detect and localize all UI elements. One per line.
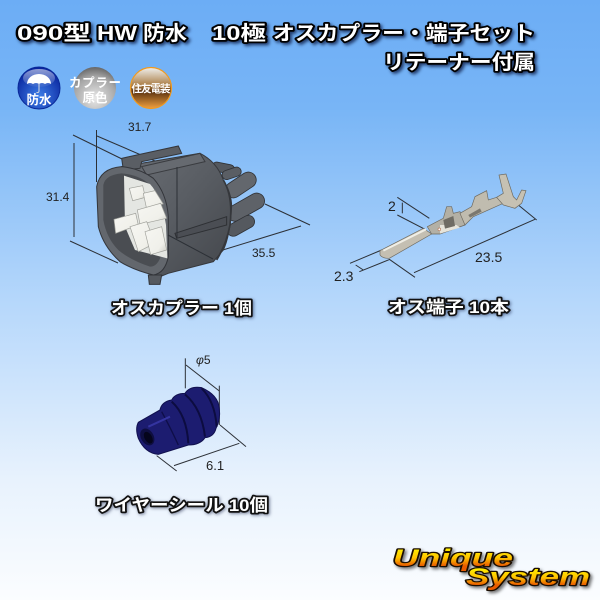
badges — [18, 67, 172, 109]
connector dimension values: 31.4 — [46, 190, 70, 204]
seal dimension values: 6.1 — [206, 458, 224, 473]
logo: Unique System: Unique — [393, 545, 513, 572]
title: 防水 — [143, 22, 187, 45]
terminal dimension values: 2.3 — [334, 268, 354, 284]
wire seal — [137, 387, 220, 454]
connector dimension values — [46, 120, 276, 260]
terminal — [380, 174, 526, 258]
connector white interior and terminals — [114, 176, 167, 258]
badge: Sumitomo Wiring: 住友電装 — [132, 82, 171, 95]
terminal dimension values: 23.5 — [475, 249, 502, 265]
connector dimension lines — [70, 130, 310, 263]
connector front dimension lines — [168, 167, 213, 259]
badge: housing colour — [69, 67, 121, 109]
badge: housing colour: 原色 — [82, 90, 108, 105]
title: 10極 — [212, 22, 266, 45]
title: リテーナー付属 — [383, 51, 535, 74]
badge: housing colour: カプラー — [69, 76, 121, 90]
badge: Sumitomo Wiring — [130, 68, 172, 108]
logo: Unique System — [393, 545, 590, 591]
connector dimension values: 31.7 — [128, 120, 152, 134]
seal dimension values: φ5 — [196, 353, 211, 367]
connector rear pins — [217, 167, 257, 230]
wire seal dimensions and photo — [137, 353, 246, 473]
connector dimensions and photo — [46, 120, 310, 284]
title: HW — [97, 23, 137, 45]
logo: Unique System: System — [466, 564, 590, 591]
badge: waterproof: 防水 — [26, 92, 52, 107]
badge: waterproof — [18, 67, 60, 109]
terminal dimension values: 2 — [388, 198, 396, 214]
title: オスカプラー・端子セット — [273, 22, 535, 45]
title — [17, 22, 535, 74]
label: wire seal: ワイヤーシール 10個 — [95, 496, 268, 515]
seal dimension lines — [157, 358, 246, 471]
label: male coupler: オスカプラー 1個 — [111, 299, 252, 318]
seal dimension values — [196, 353, 224, 473]
terminal dimension lines — [350, 197, 537, 277]
connector housing — [97, 146, 232, 284]
connector dimension values: 35.5 — [252, 246, 276, 260]
label: male terminal: オス端子 10本 — [388, 298, 509, 317]
terminal dimension values — [334, 198, 502, 284]
terminal dimensions and photo — [334, 174, 537, 284]
title: 090型 — [17, 22, 91, 45]
